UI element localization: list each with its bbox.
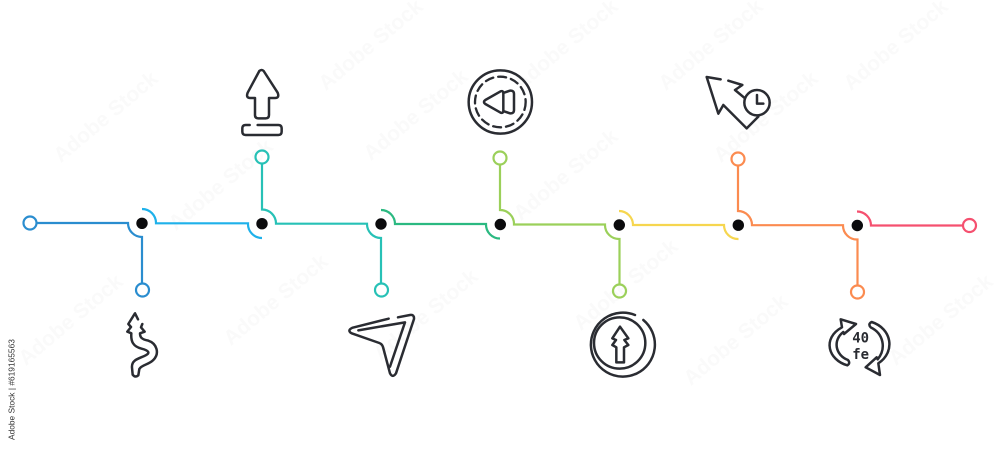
icon: winding road arrow [127, 313, 157, 377]
icon: up arrow in circle [591, 313, 655, 377]
timeline infographic: Adobe Stock [164, 135, 278, 235]
segment 7: orange upper and lower branch [732, 152, 864, 298]
segment 2: sky blue connector [142, 209, 262, 238]
timeline infographic: Adobe Stock [359, 65, 473, 165]
icon: rotating arrows with 40 fe [830, 319, 889, 375]
icon: rotating arrows with 40 fe: 40 [852, 331, 869, 347]
timeline infographic: Adobe Stock [884, 270, 998, 370]
segment 6: yellow connector [619, 211, 738, 239]
timeline infographic: Adobe Stock [569, 235, 683, 335]
timeline infographic: Adobe Stock [14, 270, 128, 370]
stock credit text: Adobe Stock | #619165563 [6, 339, 16, 440]
segment 8: pink end line [857, 212, 976, 232]
timeline infographic: Adobe Stock [709, 67, 823, 167]
segment 3: teal upper branch and connector [256, 150, 388, 296]
timeline infographic: Adobe Stock [219, 250, 333, 350]
timeline infographic: Adobe Stock [679, 290, 793, 390]
icon: upload arrow [242, 70, 282, 135]
icon: navigation arrow [349, 315, 414, 376]
segment 5: light green upper and lower branch [494, 152, 626, 298]
timeline infographic: Adobe Stock [509, 125, 623, 225]
icon: cursor arrow with clock [707, 77, 770, 128]
segment 1: blue start line and lower branch [24, 216, 149, 296]
timeline infographic: Adobe Stock [369, 265, 483, 365]
segment 4: green connector [381, 210, 500, 238]
icon: rewind in circle [469, 70, 532, 134]
node dots [136, 218, 863, 231]
timeline infographic: Adobe Stock [49, 67, 163, 167]
icon: rotating arrows with 40 fe: fe [852, 347, 869, 363]
